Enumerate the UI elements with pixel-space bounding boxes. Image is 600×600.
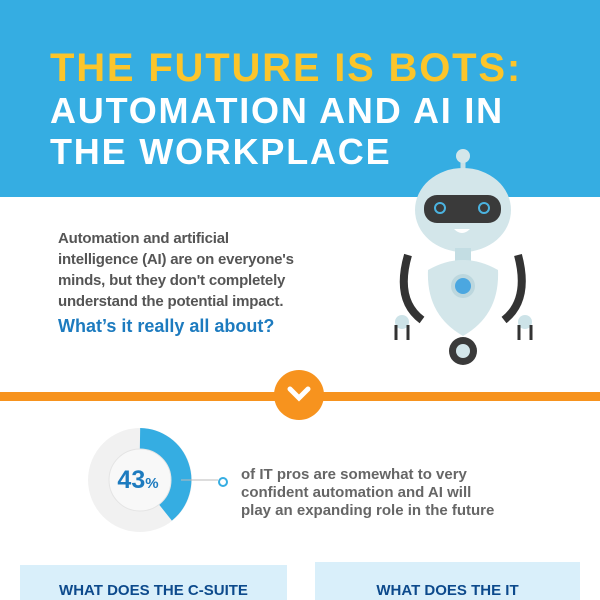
stat text <box>241 466 494 519</box>
orange divider with chevron <box>0 370 600 420</box>
title: THE WORKPLACE <box>50 131 391 172</box>
panel: IT <box>315 562 580 600</box>
intro text <box>58 230 294 336</box>
stat text: of IT pros are somewhat to very <box>241 466 467 483</box>
panel: c-suite: WHAT DOES THE C-SUITE <box>59 582 248 599</box>
donut 43%: 43% <box>117 466 159 494</box>
intro text: minds, but they don't completely <box>58 272 285 289</box>
title: AUTOMATION AND AI IN <box>50 90 504 131</box>
intro text: intelligence (AI) are on everyone's <box>58 251 294 268</box>
donut 43% <box>88 428 218 532</box>
intro text: Automation and artificial <box>58 230 229 247</box>
title: THE FUTURE IS BOTS: <box>50 46 522 90</box>
stat text: play an expanding role in the future <box>241 502 494 519</box>
title <box>50 46 522 172</box>
stat text: confident automation and AI will <box>241 484 471 501</box>
robot illustration <box>394 149 532 365</box>
panel: c-suite <box>20 565 287 600</box>
panel: IT: WHAT DOES THE IT <box>376 582 519 599</box>
header banner <box>0 0 600 197</box>
intro text: understand the potential impact. <box>58 293 283 310</box>
connector dot <box>218 477 228 487</box>
intro text: What’s it really all about? <box>58 316 274 336</box>
